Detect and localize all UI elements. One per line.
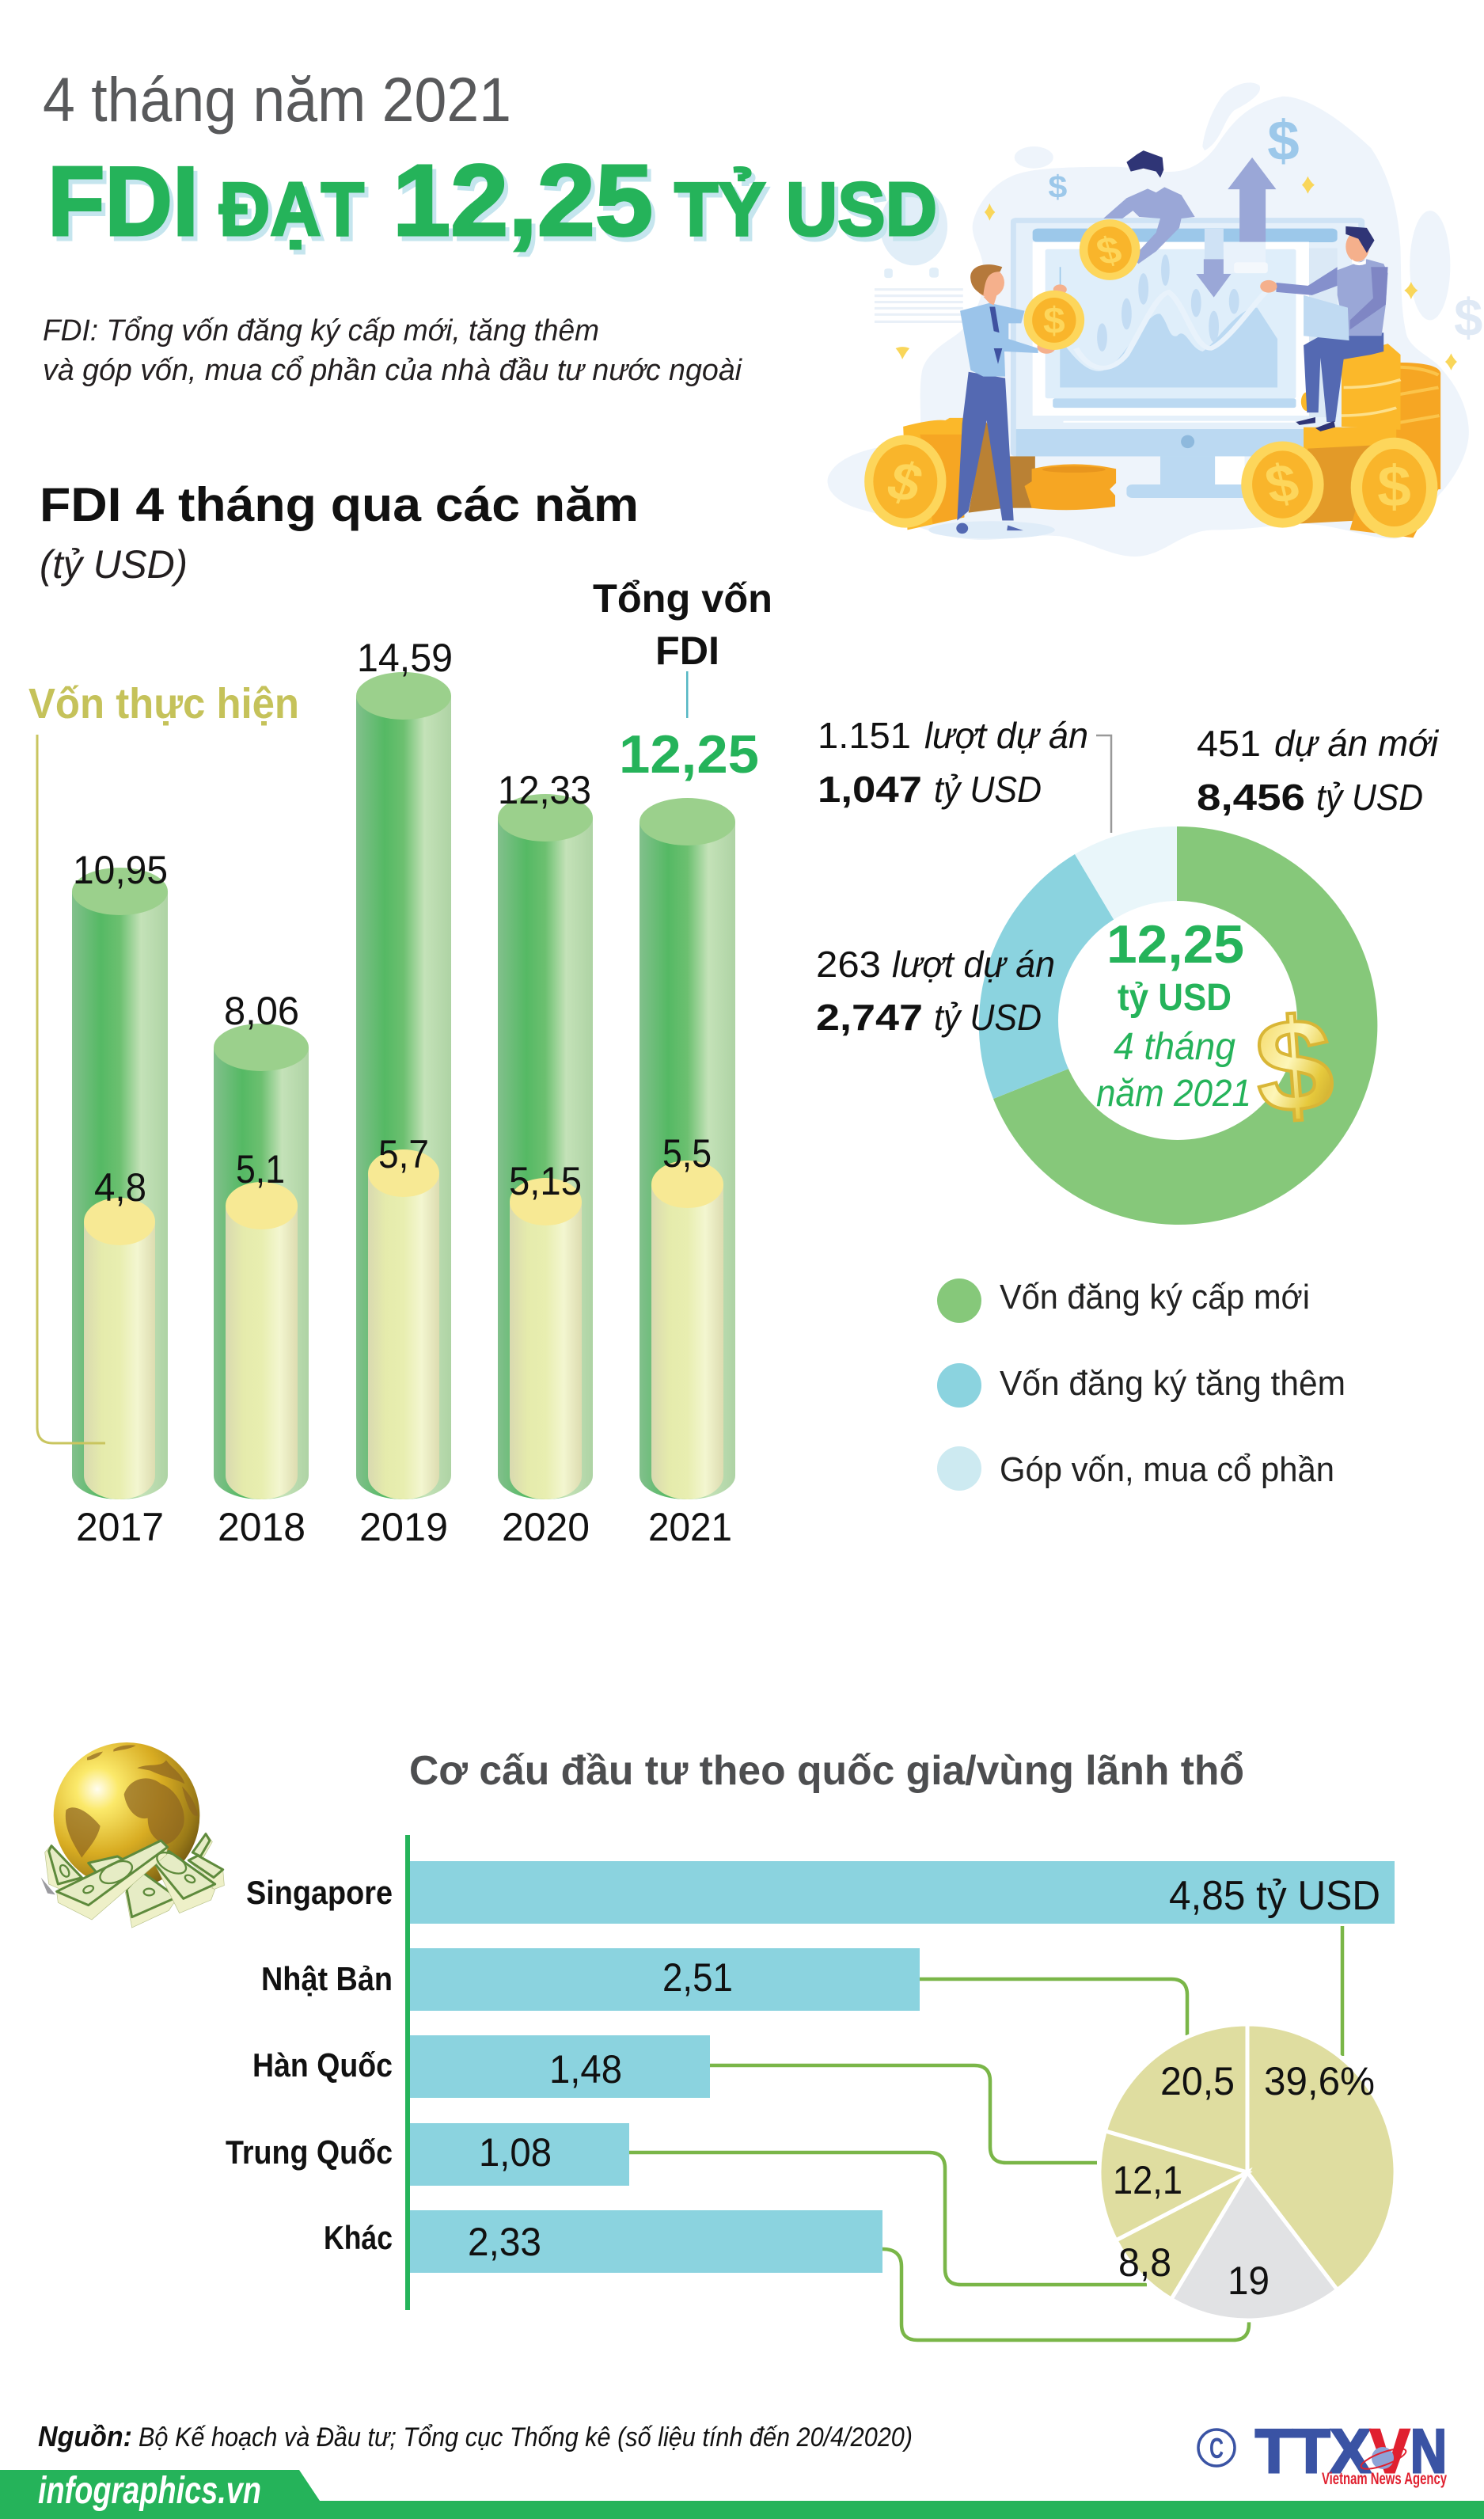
cylinder 2017 [72,868,168,1499]
side list dots [884,268,939,278]
donut chart [979,826,1377,1225]
copyright mark: C [1209,2432,1224,2464]
dollar sign small: $ [1048,169,1067,204]
donut label: capital contribution: lượt dự án [924,715,1088,756]
donut leader line [1096,735,1111,833]
legend item: new capital [937,1278,1310,1323]
title: main headline [47,144,937,257]
cylinder chart [37,636,735,1549]
arrow up [1228,158,1276,242]
centre period line 1: 4 tháng [1114,1026,1235,1068]
realised values [94,1131,712,1210]
donut label: additional capital: 263 [816,944,881,985]
monitor [1011,218,1364,498]
right man [1260,226,1388,431]
bar: Nhật Bản [261,1948,920,2011]
segment: new registered capital [993,826,1377,1225]
big coin left [864,435,946,528]
pie labels: 12,1 [1113,2158,1182,2202]
legend item: contribution: Góp vốn, mua cổ phần [1000,1450,1334,1489]
total values: 10,95 [73,848,168,892]
continents [66,1745,198,1858]
connector: Nhật Bản [920,1979,1187,2035]
donut label: additional capital: 2,747 [816,997,923,1038]
note line 2: và góp vốn, mua cổ phần của nhà đầu tư nước ngoài [43,354,743,387]
centre total: 12,25 [1106,914,1244,975]
total values: 8,06 [224,989,299,1033]
source: Bộ Kế hoạch và Đầu tư; Tổng cục Thống kê (số liệu tính đến 20/4/2020) [139,2422,913,2453]
cylinder 2018 [214,1024,309,1499]
pie labels: 8,8 [1118,2240,1171,2285]
small globe [1359,2445,1408,2473]
bar: Singapore [246,1861,1395,1924]
big coin right [1351,438,1437,538]
connector lines bars to pie [629,1926,1342,2340]
horizontal bar chart [226,1835,1395,2310]
donut label: new projects: dự án mới [1274,723,1440,764]
wordmark: TTX [1255,2416,1371,2486]
pie labels [1113,2059,1375,2303]
total value 2021: 12,25 [619,724,759,785]
realised values: 5,15 [509,1159,582,1203]
pie labels: 39,6% [1264,2059,1375,2103]
slice: Nhật Bản 20.5 [1105,2024,1247,2172]
bar: Singapore: Singapore [246,1874,393,1911]
source: Nguồn: [38,2420,132,2453]
bar: Trung Quốc: 1,08 [479,2130,552,2175]
segment: capital contribution [1075,826,1177,1026]
coin stack left back [903,418,1035,530]
realised values: 4,8 [94,1165,146,1210]
wordmark [1255,2416,1447,2486]
big coin middle: $ [1259,452,1304,515]
bar: Khác: Khác [324,2219,393,2256]
connector: Trung Quốc [629,2152,1147,2285]
year labels: 2020 [502,1505,590,1549]
coin stack right [1300,344,1440,538]
connector: Hàn Quốc [710,2065,1097,2163]
banknote stacks [45,1833,224,1928]
donut label: additional capital: tỷ USD [934,997,1042,1038]
wordmark: N [1410,2416,1447,2486]
total values: 12,33 [498,768,591,812]
big coin right: $ [1377,454,1411,519]
right bubble [1410,211,1450,320]
big coin middle [1241,441,1324,528]
donut label: capital contribution: 1.151 [818,715,911,756]
small bubble [1015,146,1053,169]
label: Tổng vốn FDI [593,576,772,673]
year labels: 2018 [218,1505,306,1549]
ĐẠT: ĐẠT [219,167,364,252]
bar: Nhật Bản: Nhật Bản [261,1960,393,1997]
cylinder 2020 [498,794,593,1499]
bar: Hàn Quốc [252,2035,710,2098]
connector: Khác [882,2249,1249,2340]
unit: (tỷ USD) [40,542,188,587]
left man [956,264,1067,534]
copyright mark [1198,2430,1235,2466]
donut label: additional capital [816,944,1055,1038]
side list lines [875,290,963,321]
shoe shadow [928,521,1055,538]
label line 2: FDI [655,629,719,673]
donut label: capital contribution [818,715,1088,810]
shadow [41,1878,55,1894]
year labels: 2021 [648,1505,732,1549]
realised values: 5,5 [662,1131,712,1176]
segment: additional capital [979,854,1177,1099]
footer band [0,2470,1484,2519]
note line 1: FDI: Tổng vốn đăng ký cấp mới, tăng thêm [43,314,599,348]
coin held left [1023,291,1084,350]
donut hole [1058,901,1297,1140]
year labels: 2019 [359,1505,448,1549]
donut label: new projects: tỷ USD [1316,777,1423,818]
donut label: new projects: 451 [1197,723,1261,764]
footer site name: infographics.vn [38,2470,261,2512]
pie labels: 20,5 [1160,2059,1235,2103]
logo: TTXVN [1198,2416,1447,2488]
donut label: capital contribution: tỷ USD [934,769,1042,810]
title: period: 4 tháng năm 2021 [43,64,511,135]
label line 1: Tổng vốn [593,576,772,621]
bar: Trung Quốc: Trung Quốc [226,2133,393,2171]
bar: Singapore: 4,85 tỷ USD [1169,1873,1380,1919]
definition note [43,314,743,387]
slice: Trung Quốc 8.8 [1116,2172,1247,2299]
donut label: new projects [1197,723,1440,818]
donut label: new projects: 8,456 [1197,777,1305,818]
label: Vốn thực hiện: Vốn thực hiện [28,680,299,728]
arrow down [1196,259,1231,298]
wordmark: V [1370,2416,1410,2486]
coin held left: $ [1043,299,1065,341]
axis [405,1835,410,2310]
year labels: 2017 [76,1505,164,1549]
icon: gold dollar: $ [1251,990,1338,1142]
coin stack small [1025,464,1116,510]
cylinder 2021 [640,798,735,1499]
donut label: capital contribution: 1,047 [818,769,922,810]
legend item: new capital: Vốn đăng ký cấp mới [1000,1278,1310,1316]
callout line: Vốn thực hiện [37,735,105,1443]
12,25: 12,25 [393,144,653,257]
icon: golden globe on banknotes [41,1742,224,1928]
realised values: 5,1 [236,1147,285,1191]
centre period line 2: năm 2021 [1096,1073,1251,1115]
realised values: 5,7 [378,1132,429,1176]
bar: Khác: 2,33 [468,2220,541,2264]
background blob [828,97,1469,557]
centre unit: tỷ USD [1118,977,1232,1019]
pie labels: 19 [1228,2259,1270,2303]
cylinder 2019 [356,672,451,1499]
legend [937,1278,1345,1491]
illustration: investors around monitor with coins [828,82,1482,557]
pie chart [1099,2024,1395,2320]
dollar sign large: $ [1267,109,1300,172]
light blue bubble [880,187,947,265]
slice: Khác 19 [1171,2172,1338,2320]
sparkles [896,177,1457,370]
top man [1103,150,1195,264]
blob tail [1202,82,1260,150]
heading: bar chart: FDI 4 tháng qua các năm [40,478,639,531]
bar: Nhật Bản: 2,51 [662,1955,733,2000]
big coin left: $ [880,450,931,514]
bar: Khác [324,2210,882,2273]
TỶ USD: TỶ USD [674,167,937,252]
year labels [76,1505,732,1549]
total values: 14,59 [357,636,453,680]
donut label: additional capital: lượt dự án [892,944,1055,985]
globe [54,1742,199,1889]
total values [73,636,591,1033]
bar: Trung Quốc [226,2123,629,2186]
slice: Singapore 39.6 [1247,2024,1395,2289]
bar: Hàn Quốc: Hàn Quốc [252,2046,393,2084]
bar: Hàn Quốc: 1,48 [549,2047,622,2092]
connector: total FDI [686,671,689,718]
heading: investment structure: Cơ cấu đầu tư theo quốc gia/vùng lãnh thổ [409,1748,1244,1794]
legend item: additional capital: Vốn đăng ký tăng thêm [1000,1364,1345,1403]
coin held top: $ [1091,228,1126,272]
slice: Hàn Quốc 12.1 [1099,2131,1247,2240]
connector: Singapore [1341,1926,1344,2056]
FDI: FDI [47,147,199,256]
coin held top [1080,219,1140,280]
